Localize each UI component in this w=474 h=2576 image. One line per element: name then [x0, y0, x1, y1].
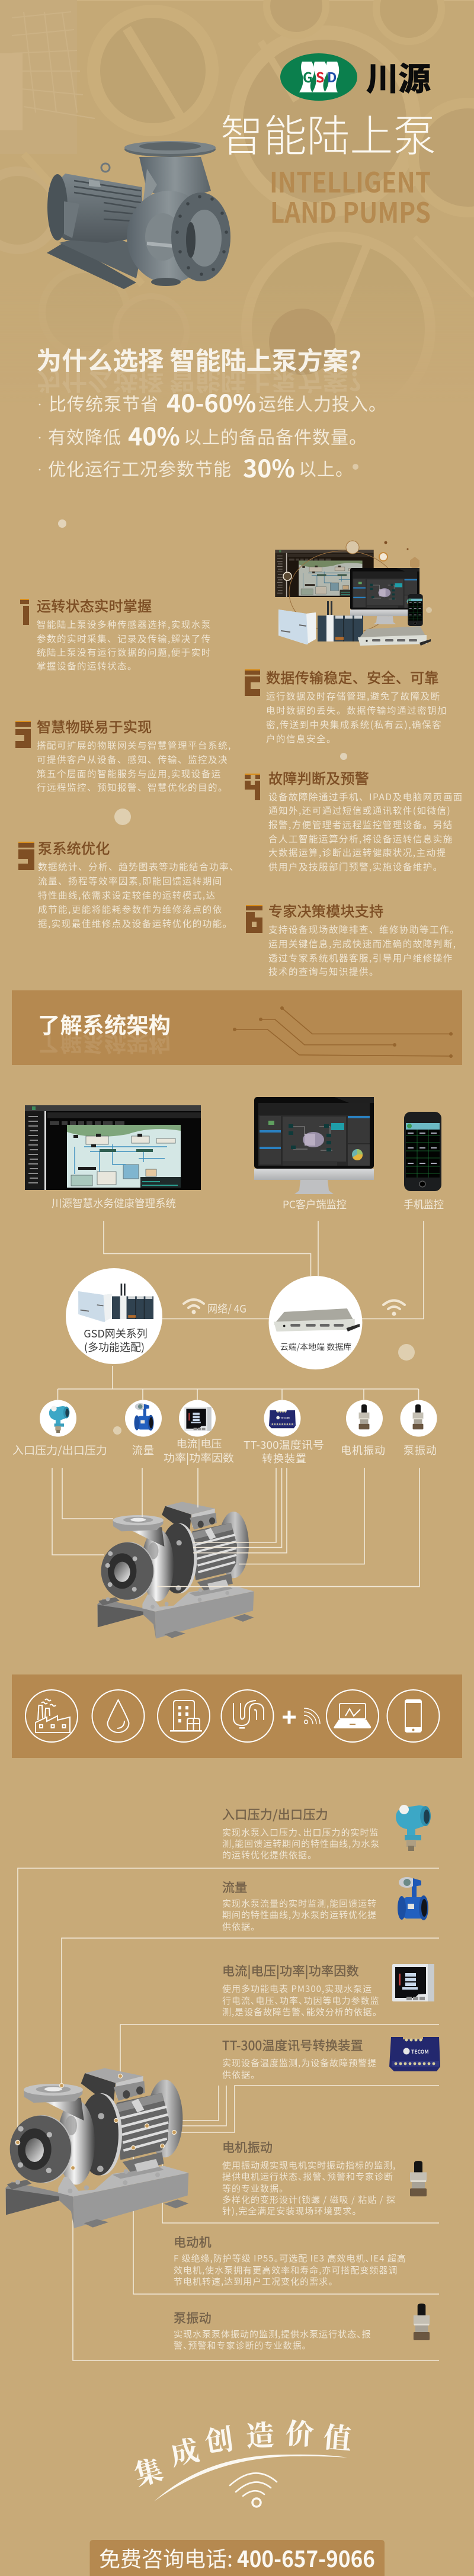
- feature 3: 搭配可扩展的物联网关与智慧管理平台系统,: [37, 739, 232, 752]
- benefits list: 以上的备品备件数量。: [184, 423, 367, 449]
- feature 3: 策五个层面的智能服务与应用,实现设备运: [37, 767, 222, 780]
- benefits list: 比传统泵节省: [49, 390, 159, 416]
- detail: pressure: 实现水泵入口压力、出口压力的实时监: [222, 1826, 379, 1839]
- detail: motor vibration: 等的专业数据。: [222, 2182, 284, 2195]
- feature 4: 设备故障除通过手机、IPAD及电脑网页画面: [268, 790, 463, 803]
- detail: flow: 流量: [222, 1878, 248, 1896]
- decorative circle behind heading: [269, 309, 335, 375]
- banner: application icons: [12, 1674, 462, 1758]
- number 1: [20, 599, 29, 625]
- contact bar: [90, 2540, 385, 2576]
- server node: 云端/本地端 数据库: [280, 1341, 351, 1353]
- feature 4: 合人工智能运算分析,将设备运转信息实施: [268, 832, 453, 845]
- benefits list: 优化运行工况参数节能: [48, 455, 232, 481]
- feature 2: [245, 666, 447, 745]
- architecture: PC monitor: [254, 1097, 374, 1194]
- detail: pressure: 入口压力/出口压力: [222, 1805, 328, 1823]
- feature 5: 成节能,更能将能耗参数作为维修落点的依: [38, 903, 223, 916]
- slogan: 价: [284, 2411, 315, 2453]
- logo: G: [303, 66, 313, 86]
- gateway node: [66, 1268, 162, 1364]
- detail: motor vibration: 提供电机运行状态、报警、预警和专家诊断: [222, 2170, 393, 2183]
- sensor circle: TT-300: [264, 1400, 301, 1437]
- feature 1: [20, 595, 212, 672]
- slogan: [129, 2411, 354, 2494]
- sensor labels: 入口压力/出口压力: [12, 1442, 107, 1458]
- feature 3: 行远程监控、预知报警、智慧优化的目的。: [37, 781, 228, 794]
- benefits list: 有效降低: [48, 423, 121, 449]
- slogan: 成: [166, 2427, 202, 2474]
- banner: system architecture: 了解系统架构: [38, 1029, 171, 1061]
- detail: TT-300: TT-300温度讯号转换装置: [222, 2036, 363, 2054]
- sensor tree lines: [58, 1366, 418, 1400]
- feature 2: 数据传输稳定、安全、可靠: [266, 666, 439, 687]
- feature 6: [246, 900, 460, 978]
- hero english title: [270, 160, 431, 231]
- hero english title: LAND PUMPS: [270, 190, 431, 231]
- icon: pipe: [222, 1690, 274, 1742]
- feature 6: 专家决策模块支持: [268, 900, 383, 920]
- architecture: top labels: 手机监控: [403, 1196, 444, 1212]
- contact bar: 免费咨询电话:: [99, 2542, 233, 2573]
- feature 6: 透过专家系统机器客服,引导用户维修操作: [268, 951, 453, 964]
- icon: smartphone: [387, 1690, 440, 1742]
- section heading: why choose: 为什么选择 智能陆上泵方案?: [36, 364, 361, 400]
- logo: D: [327, 66, 337, 86]
- detail: TT-300: [222, 2036, 440, 2081]
- large pump: [5, 2068, 188, 2228]
- feature 2: 电时数据的丢失。数据传输均通过密钥加: [266, 704, 447, 717]
- sensor circle: pump vibration: [401, 1400, 437, 1437]
- hero pump: [47, 141, 230, 289]
- connector lines: top level: [104, 1221, 424, 1319]
- sensor circle: power meter: [179, 1400, 216, 1437]
- detail: flow: [222, 1877, 428, 1933]
- wifi icon: network: [184, 1300, 204, 1314]
- feature 1: 智能陆上泵设多种传感器选择,实现水泵: [37, 618, 212, 631]
- slogan: 造: [245, 2413, 276, 2455]
- icon: water drop: [92, 1690, 145, 1742]
- feature 5: 泵系统优化: [38, 837, 110, 858]
- detail: motor vibration: 针),完全满足安装现场环境要求。: [222, 2205, 357, 2217]
- detail: motor: 节电机转速,达到用户工况变化的需求。: [174, 2275, 334, 2288]
- number 4: [245, 774, 260, 800]
- detail section: lead lines: [18, 1868, 439, 2360]
- feature 5: 特性曲线,依需求设定较佳的运转模式,达: [38, 888, 216, 902]
- slogan: 值: [322, 2414, 354, 2458]
- detail: electrical: 电流|电压|功率|功率因数: [222, 1962, 359, 1980]
- architecture: phone: [404, 1112, 441, 1191]
- slogan: 集: [129, 2447, 167, 2494]
- sensor labels: 电流|电压: [177, 1436, 222, 1451]
- architecture: top labels: [52, 1195, 444, 1212]
- feature 5: 据,实现最佳维修点及设备运转优化的功能。: [38, 917, 233, 930]
- detail: pump vibration: 泵振动: [174, 2309, 212, 2327]
- benefits list: 40-60%: [166, 384, 256, 419]
- detail: pump vibration: 实现水泵泵体振动的监测,提供水泵运行状态、报: [174, 2328, 371, 2340]
- banner: system architecture: [12, 990, 462, 1065]
- sensor circle: flow: [125, 1400, 162, 1437]
- benefits list: [39, 384, 387, 485]
- detail: TT-300: 实现设备温度监测,为设备故障预警提: [222, 2057, 377, 2069]
- benefits list: 运维人力投入。: [258, 390, 387, 416]
- feature 2: 户的信息安全。: [266, 732, 337, 745]
- icon: plus: [283, 1711, 296, 1724]
- icon: laptop: [326, 1690, 379, 1742]
- benefits list: 30%: [243, 449, 295, 485]
- detail: motor: 电动机: [174, 2233, 212, 2251]
- feature 3: [15, 716, 232, 794]
- benefits list: 40%: [128, 417, 180, 453]
- detail: flow: 实现水泵流量的实时监测,能回馈运转: [222, 1897, 377, 1910]
- icon: signal: [304, 1708, 320, 1724]
- number 6: [246, 905, 262, 933]
- contact bar: 400-657-9066: [237, 2541, 375, 2574]
- number 5: [18, 842, 34, 870]
- feature 5: 流量、扬程等效率因素,即能回馈运转期间: [38, 874, 223, 887]
- sensor labels: TT-300温度讯号: [244, 1437, 324, 1452]
- sensor labels: 转换装置: [262, 1451, 306, 1466]
- number 2: [245, 669, 260, 696]
- feature 6: 支持设备现场故障排查、维修协助等工作。: [268, 923, 460, 936]
- feature 2: 运行数据及时存储管理,避免了故障及断: [266, 689, 441, 702]
- feature 1: 掌握设备的运转状态。: [37, 659, 137, 672]
- feature 1: 统陆上泵没有运行数据的问题,便于实时: [37, 646, 212, 659]
- hero background: aerial water treatment tanks: [0, 0, 474, 207]
- number 3: [15, 721, 31, 748]
- hero title: 智能陆上泵: [220, 101, 436, 164]
- hero english title: INTELLIGENT: [270, 160, 431, 201]
- small pump with sensor leads: [52, 1468, 419, 1638]
- sensor labels: [12, 1436, 437, 1466]
- detail: motor: [174, 2233, 406, 2288]
- feature 3: 可提供客户从设备、感知、传输、监控及决: [37, 753, 228, 766]
- sensor labels: 电机振动: [341, 1442, 385, 1458]
- detail: motor vibration: [222, 2138, 427, 2217]
- pump callout dots: [15, 2074, 177, 2170]
- detail: electrical: 使用多功能电表 PM300,实现水泵运: [222, 1982, 372, 1995]
- gateway node: (多功能选配): [84, 1339, 145, 1355]
- icon: factory: [25, 1690, 78, 1742]
- sensor circle: pressure: [40, 1400, 76, 1437]
- gateway node: GSD网关系列: [84, 1326, 148, 1341]
- detail: pump vibration: 警、预警和专家诊断的专业数据。: [174, 2339, 307, 2352]
- feature 5: 数据统计、分析、趋势图表等功能结合功率、: [38, 860, 239, 873]
- detail: pressure: 测,能回馈运转期间的特性曲线,为水泵: [222, 1837, 380, 1850]
- logo: [280, 53, 431, 101]
- detail: electrical: 测,是设备故障告警、能效分析的依据。: [222, 2006, 377, 2018]
- network label: 网络/ 4G: [207, 1301, 246, 1316]
- logo: 川源: [366, 53, 431, 100]
- logo: S: [316, 66, 324, 86]
- server node: [269, 1276, 363, 1369]
- banner: system architecture: 了解系统架构: [38, 1008, 171, 1040]
- detail: electrical: 行电流、电压、功率、功因等电力参数监: [222, 1994, 380, 2007]
- wifi icon: phone link: [383, 1301, 405, 1316]
- feature 4: 故障判断及预警: [268, 767, 369, 788]
- architecture: top labels: 川源智慧水务健康管理系统: [52, 1195, 176, 1211]
- feature 4: 报警,方便管理者远程监控管理设备。另结: [268, 818, 453, 831]
- feature 3: 智慧物联易于实现: [37, 716, 152, 736]
- wifi icon: slogan: [230, 2473, 277, 2507]
- detail: flow: 期间的特性曲线,为水泵的运转优化提: [222, 1908, 377, 1921]
- detail: electrical: [222, 1962, 434, 2018]
- feature composite image: [275, 541, 432, 646]
- architecture: top labels: PC客户端监控: [283, 1196, 347, 1212]
- detail: TT-300: 供依据。: [222, 2068, 256, 2081]
- detail: pressure: 的运转优化提供依据。: [222, 1849, 313, 1861]
- section heading: why choose: [36, 341, 361, 400]
- detail: pump vibration: [174, 2304, 430, 2352]
- detail: motor vibration: 电机振动: [222, 2138, 273, 2156]
- slogan arc: [154, 2455, 347, 2501]
- detail: motor vibration: 多样化的变形设计(锁螺 / 磁吸 / 粘贴 / 探: [222, 2193, 396, 2206]
- section heading: why choose: 为什么选择 智能陆上泵方案?: [36, 341, 361, 377]
- sensor labels: 功率|功率因数: [164, 1450, 234, 1465]
- feature 4: 通知外,还可通过短信或通讯软件(如微信): [268, 804, 451, 817]
- sensor circle: motor vibration: [346, 1400, 383, 1437]
- feature 1: 参数的实时采集、记录及传输,解决了传: [37, 632, 212, 645]
- feature 1: 运转状态实时掌握: [37, 595, 152, 615]
- detail: pressure: [222, 1805, 431, 1861]
- sensor labels: 泵振动: [403, 1442, 437, 1458]
- feature 5: [18, 837, 239, 930]
- feature 4: [245, 767, 463, 873]
- detail: motor: F 级绝缘,防护等级 IP55。可选配 IE3 高效电机、IE4 超高: [174, 2252, 406, 2264]
- feature 4: 供用户及技服部门预警,实施设备维护。: [268, 860, 443, 873]
- feature 6: 运用关键信息,完成快速而准确的故障判断,: [268, 937, 457, 950]
- slogan: 创: [202, 2416, 236, 2460]
- feature 4: 大数据运算,诊断出运转健康状况,主动提: [268, 846, 447, 859]
- detail: motor vibration: 使用振动规实现电机实时振动指标的监测,: [222, 2159, 396, 2171]
- sensor labels: 流量: [132, 1442, 154, 1458]
- detail: motor: 效电机,使水泵拥有更高效率和寿命,亦可搭配变频器调: [174, 2264, 398, 2276]
- feature 6: 技术的查询与知识提供。: [268, 965, 379, 978]
- detail: flow: 供依据。: [222, 1920, 256, 1933]
- benefits list: 以上。: [299, 455, 354, 481]
- icon: building: [158, 1690, 210, 1742]
- architecture: management platform screen: [25, 1105, 201, 1190]
- feature 2: 密,传送到中央集成系统(私有云),确保客: [266, 718, 442, 731]
